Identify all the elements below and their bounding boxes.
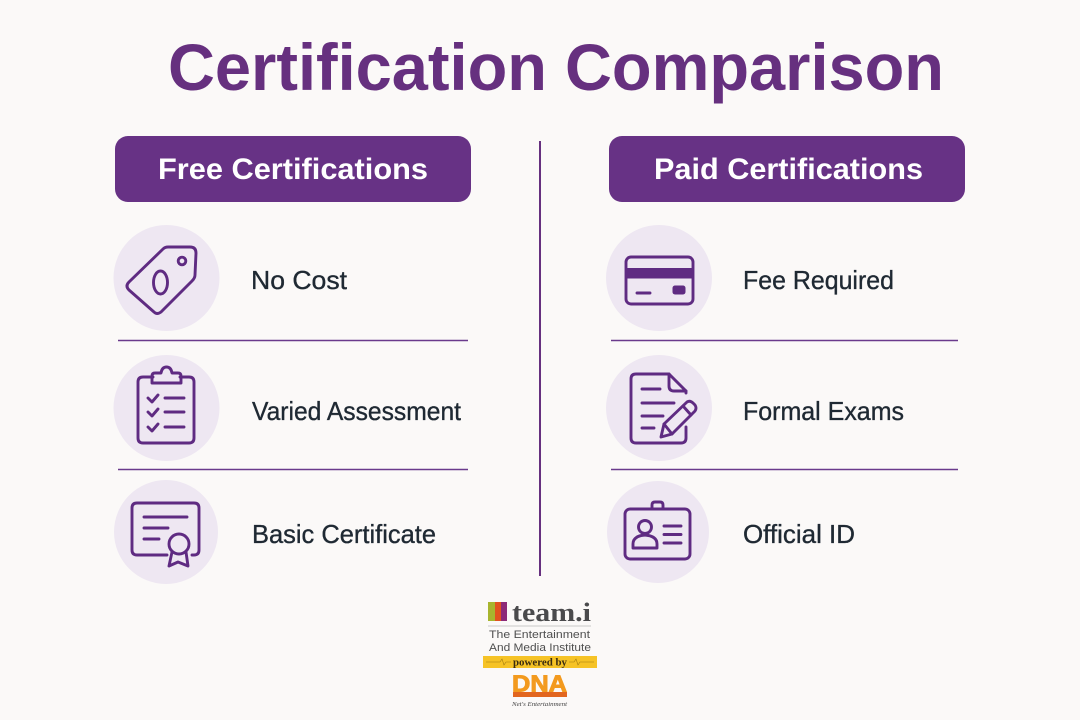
- powered by band: powered by: [513, 658, 567, 668]
- DNA logo: DNA: [512, 670, 567, 696]
- label: varied assessment: Varied Assessment: [252, 396, 462, 426]
- logo mark: [488, 602, 507, 621]
- label: fee required: Fee Required: [743, 265, 894, 295]
- logo tagline: The Entertainment: [489, 629, 590, 641]
- icon: official id badge: [607, 481, 709, 583]
- panel: free certifications: [114, 136, 471, 584]
- logo tagline: [489, 629, 591, 654]
- label: basic certificate: Basic Certificate: [252, 519, 436, 549]
- heading: free certifications: Free Certifications: [158, 153, 428, 186]
- icon: clipboard checklist: [114, 355, 220, 461]
- heading: paid certifications: Paid Certifications: [654, 153, 923, 186]
- logo: team.i powered by DNA: [483, 598, 597, 708]
- logo tagline: And Media Institute: [489, 642, 591, 654]
- label: formal exams: Formal Exams: [743, 396, 904, 426]
- icon: credit card: [606, 225, 712, 331]
- title: Certification Comparison: [168, 30, 944, 104]
- heading: free certifications: [115, 136, 471, 202]
- panel: paid certifications: [606, 136, 965, 583]
- icon: certificate: [114, 480, 218, 584]
- center divider: [539, 141, 541, 576]
- logo wordmark: team.i: [512, 598, 591, 627]
- icon: exam document with pencil: [606, 355, 712, 461]
- heading: paid certifications: [609, 136, 965, 202]
- label: no cost: No Cost: [251, 265, 348, 295]
- label: official id: Official ID: [743, 519, 855, 549]
- icon: price tag zero: [114, 225, 220, 331]
- DNA tagline: Net's Entertainment: [511, 701, 567, 708]
